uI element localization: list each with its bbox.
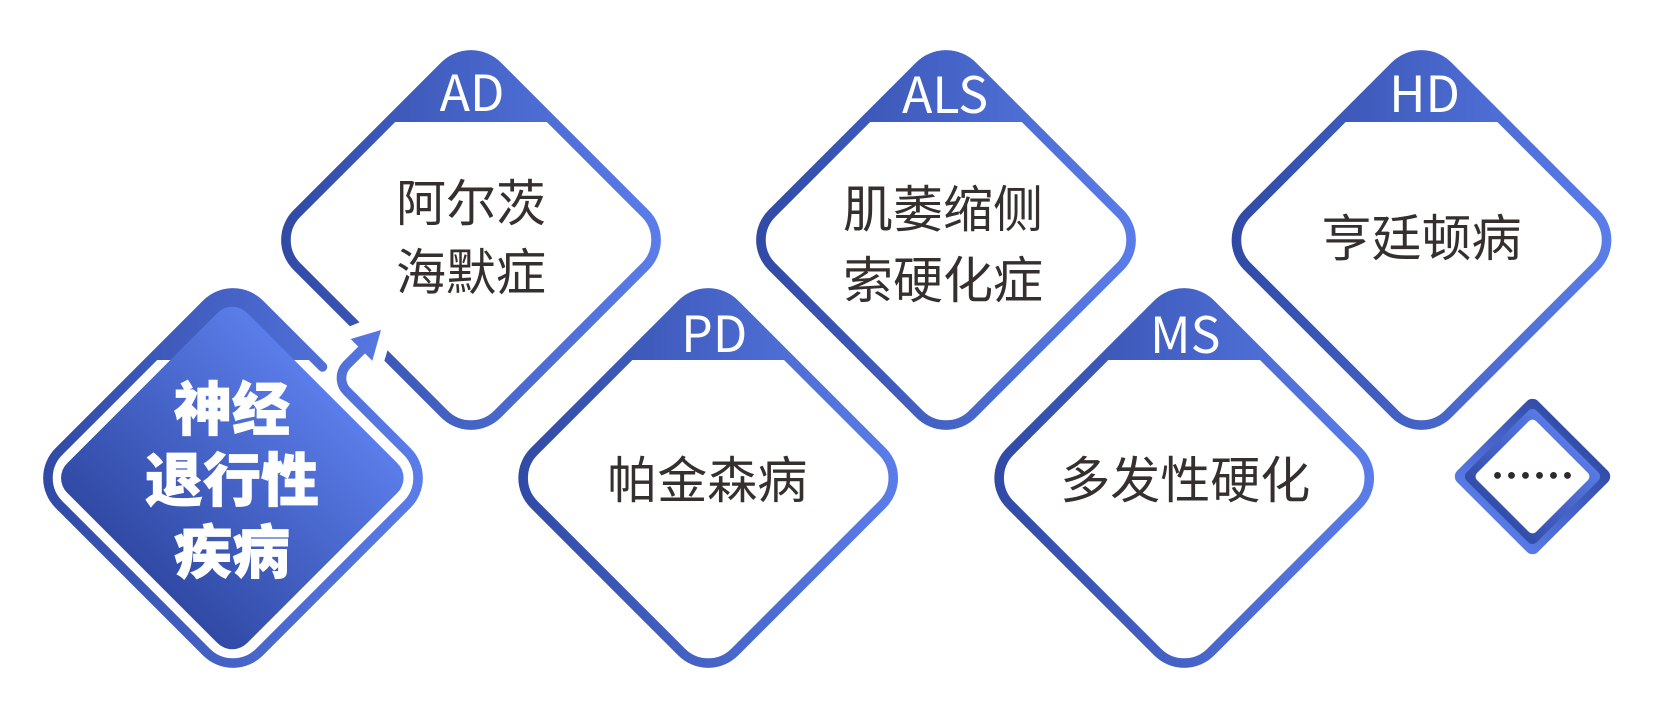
AD abbreviation: AD — [440, 54, 504, 126]
outer small diamond — [1455, 399, 1610, 554]
main title line 3: 疾病 — [174, 506, 290, 590]
arrow: outline running into arrow towards AD — [48, 293, 418, 663]
main title line 1: 神经 — [174, 363, 290, 447]
panel: MS — [999, 293, 1369, 663]
MS header cap — [1108, 298, 1260, 360]
gap in outline for arrow — [338, 319, 390, 372]
ALS name line 2: 索硬化症 — [843, 241, 1043, 313]
AD name line 2: 海默症 — [396, 233, 546, 305]
ellipsis: …… — [1490, 444, 1575, 504]
HD diamond outline — [1236, 55, 1607, 425]
panel: PD — [523, 293, 893, 663]
MS name: 多发性硬化 — [1060, 441, 1310, 513]
ALS header cap — [870, 60, 1022, 122]
MS abbreviation: MS — [1150, 296, 1220, 368]
HD abbreviation: HD — [1389, 55, 1460, 127]
main inner diamond — [61, 307, 404, 649]
ALS diamond outline — [761, 55, 1131, 425]
ALS name: 肌萎缩侧 — [843, 170, 1043, 242]
MS diamond outline — [999, 293, 1369, 663]
ALS abbreviation: ALS — [902, 56, 988, 128]
middle small diamond — [1465, 409, 1600, 544]
panel: main topic — [48, 293, 418, 663]
PD name: 帕金森病 — [607, 441, 807, 513]
white small diamond — [1476, 420, 1589, 533]
panel: more items — [1455, 399, 1610, 554]
main header cap — [157, 298, 309, 360]
HD header cap — [1346, 60, 1498, 122]
PD header cap — [632, 298, 784, 360]
AD name: 阿尔茨 — [396, 164, 546, 236]
AD diamond outline — [286, 55, 656, 425]
PD diamond outline — [523, 293, 893, 663]
PD abbreviation: PD — [681, 295, 747, 367]
panel: AD — [286, 54, 656, 425]
panel: ALS — [761, 55, 1131, 425]
panel: HD — [1236, 55, 1607, 425]
main title line 2: 退行性 — [145, 434, 319, 518]
HD name: 亨廷顿病 — [1322, 199, 1522, 271]
AD header cap — [395, 60, 547, 122]
